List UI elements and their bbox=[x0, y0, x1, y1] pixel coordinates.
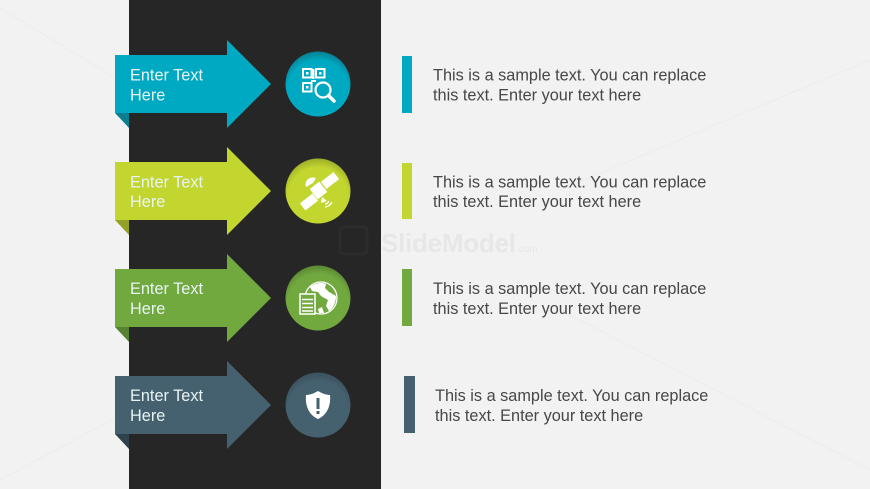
arrow 4 bbox=[115, 361, 271, 449]
description 1: This is a sample text. You can replace bbox=[433, 66, 706, 84]
bar 2 bbox=[402, 163, 412, 219]
circle 1 bbox=[286, 52, 350, 116]
dish bbox=[321, 197, 327, 203]
circle 3 bbox=[286, 266, 350, 330]
arrow 3: Enter Text bbox=[130, 280, 203, 298]
arrow 1: Here bbox=[130, 86, 165, 104]
circle 4 bbox=[286, 372, 350, 438]
arrow 1 bbox=[115, 40, 271, 128]
bar 3 bbox=[402, 269, 412, 326]
row 2 bbox=[115, 147, 706, 235]
circle 2 bbox=[286, 158, 350, 224]
row 4 bbox=[115, 361, 708, 449]
description 1: this text. Enter your text here bbox=[433, 86, 641, 104]
description 3: This is a sample text. You can replace bbox=[433, 280, 706, 298]
watermark: SlideModel bbox=[381, 228, 516, 258]
dark vertical band bbox=[129, 0, 381, 489]
bar 1 bbox=[402, 56, 412, 113]
arrow 1: Enter Text bbox=[130, 66, 203, 84]
solar panel lower left bbox=[300, 194, 318, 210]
description 4: This is a sample text. You can replace bbox=[435, 387, 708, 405]
satellite body bbox=[310, 182, 327, 199]
icon: shield with exclamation bbox=[306, 391, 330, 419]
icon: satellite bbox=[300, 172, 339, 210]
watermark bbox=[340, 227, 538, 258]
description 3: this text. Enter your text here bbox=[433, 300, 641, 318]
description 2: This is a sample text. You can replace bbox=[433, 174, 706, 192]
description 4: this text. Enter your text here bbox=[435, 407, 643, 425]
bar 4 bbox=[404, 376, 415, 433]
arrow 4: Enter Text bbox=[130, 387, 203, 405]
row 3 bbox=[115, 254, 706, 342]
dome bbox=[306, 177, 316, 187]
icon: globe and document bbox=[300, 282, 337, 314]
description 3 bbox=[433, 280, 706, 318]
description 2 bbox=[433, 174, 706, 211]
arrow 2: Here bbox=[130, 193, 165, 211]
watermark: .com bbox=[516, 244, 538, 255]
icon: qr code and magnifier bbox=[303, 69, 334, 101]
arrow 3: Here bbox=[130, 300, 165, 318]
description 4 bbox=[435, 387, 708, 425]
row 1 bbox=[115, 40, 706, 128]
arrow 2 bbox=[115, 147, 271, 235]
solar panel upper right bbox=[321, 172, 339, 189]
arrow 3 bbox=[115, 254, 271, 342]
arrow 2: Enter Text bbox=[130, 174, 203, 192]
description 1 bbox=[433, 66, 706, 104]
description 2: this text. Enter your text here bbox=[433, 193, 641, 211]
arrow 4: Here bbox=[130, 407, 165, 425]
